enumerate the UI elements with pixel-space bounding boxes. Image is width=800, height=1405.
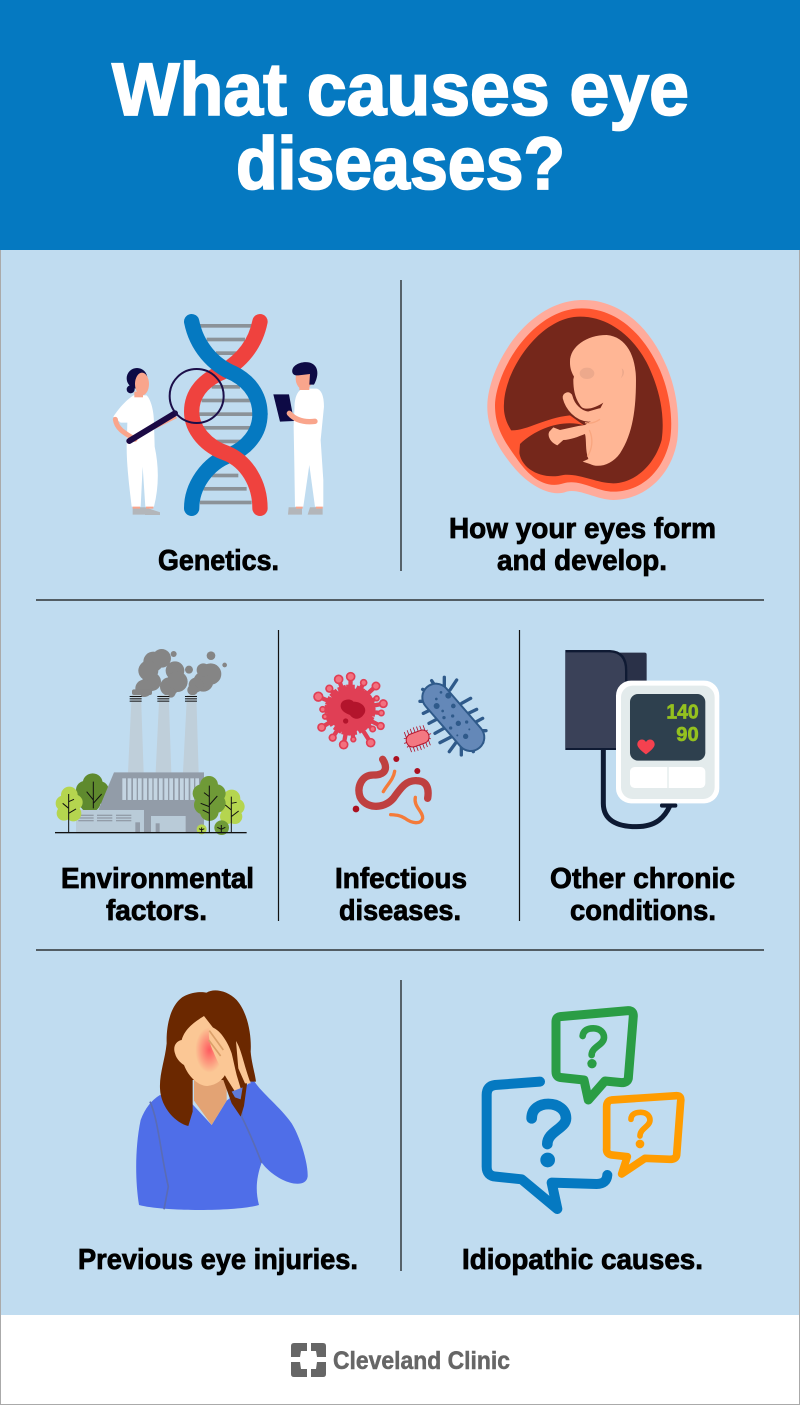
logo: Cleveland Clinic: Cleveland Clinic [333, 1347, 510, 1375]
logo: Cleveland Clinic [291, 1343, 510, 1377]
icon: embryo [487, 300, 678, 500]
heading: environmental factors [61, 863, 254, 927]
icon: DNA helix with two scientists [113, 322, 324, 515]
heading: environmental factors: factors. [106, 895, 207, 927]
heading: infectious diseases: Infectious [335, 863, 467, 895]
heading: genetics: Genetics. [158, 545, 279, 577]
icon: woman holding her injured eye [136, 990, 308, 1210]
title banner [0, 0, 800, 250]
heading: how your eyes form and develop: How your eyes form [449, 513, 716, 545]
icon: Cleveland Clinic cross mark [291, 1343, 326, 1377]
panel: genetics [113, 322, 324, 577]
heading: infectious diseases [335, 863, 467, 927]
reading: 140 over 90 [666, 702, 699, 746]
heading: idiopathic causes: Idiopathic causes. [462, 1244, 703, 1276]
title banner: What causes eye [112, 48, 689, 131]
panel: eye formation [449, 300, 716, 577]
heading: other chronic conditions: conditions. [570, 895, 716, 927]
icon: blood pressure monitor [565, 650, 719, 827]
panel: previous eye injuries [78, 990, 358, 1276]
panel: infectious diseases [314, 673, 486, 927]
heading: other chronic conditions: Other chronic [550, 863, 735, 895]
panel: other chronic conditions [550, 650, 735, 927]
heading: other chronic conditions [550, 863, 735, 927]
heading: how your eyes form and develop: and develop. [497, 545, 667, 577]
heading: environmental factors: Environmental [61, 863, 254, 895]
heading: how your eyes form and develop [449, 513, 716, 577]
heading: previous eye injuries: Previous eye injuries. [78, 1244, 358, 1276]
icon: factory with smoke and trees [55, 649, 247, 835]
icon: three speech bubbles with question marks [487, 1011, 681, 1209]
panel: idiopathic causes [462, 1011, 703, 1276]
icon: virus, bacteria and worms [314, 673, 486, 823]
reading: 140 over 90: 90 [676, 724, 699, 746]
reading: 140 over 90: 140 [666, 702, 699, 724]
title banner: diseases? [236, 122, 565, 205]
panel: environmental factors [55, 649, 254, 927]
heading: infectious diseases: diseases. [339, 895, 461, 927]
